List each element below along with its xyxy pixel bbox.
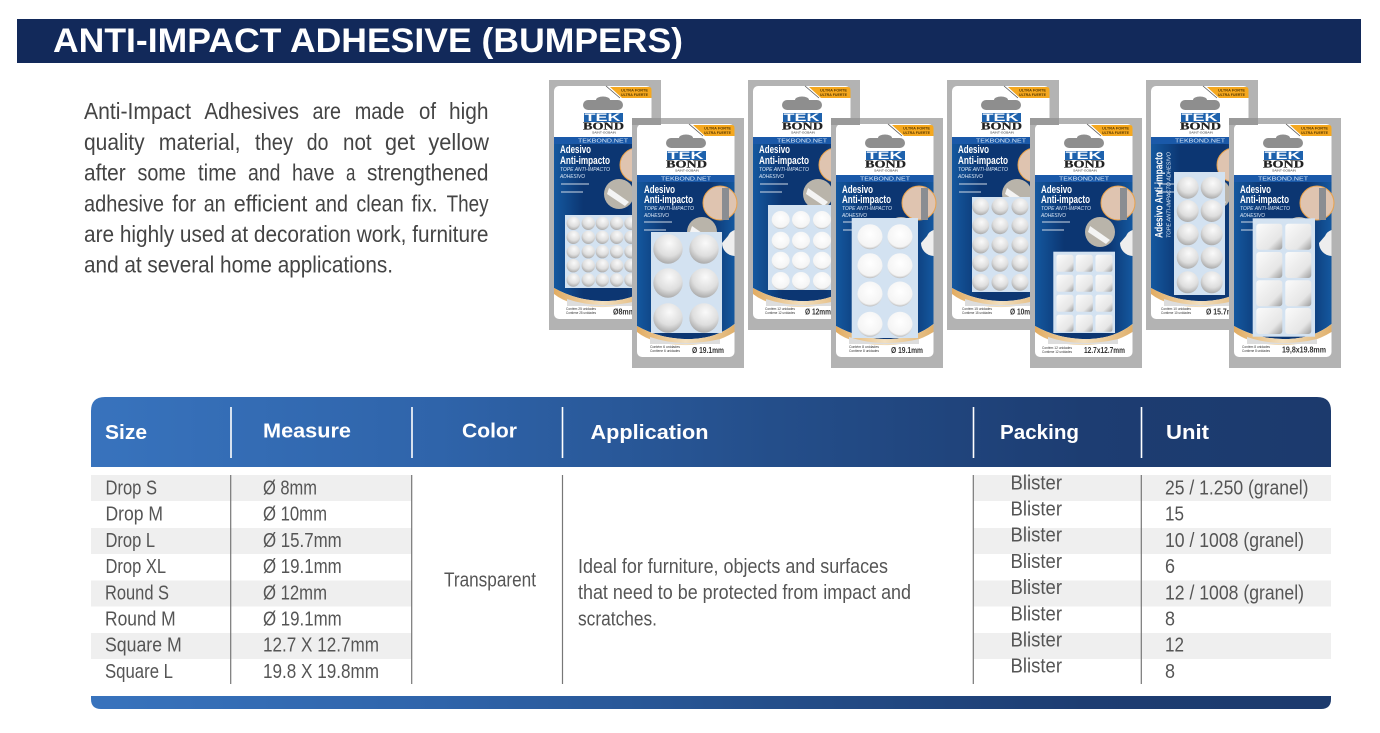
product card: Round S 12mm: ULTRA FORTE	[820, 88, 847, 92]
product card: Drop M 10mm: Contém 15 unidades	[962, 307, 992, 311]
product card: Drop S 8mm: ULTRA FORTE	[621, 88, 648, 92]
intro text block: not	[343, 129, 372, 155]
product card: Round S 12mm: Contém 12 unidades	[765, 307, 795, 311]
product card: Drop S 8mm: ULTRA FUERTE	[621, 93, 648, 97]
product card: Round S 12mm: TOPE ANTI-IMPACTO	[759, 167, 810, 173]
product card: Drop S 8mm: BOND	[583, 120, 624, 132]
product card: Drop XL 19.1mm: Contiene 6 unidades	[650, 349, 680, 353]
product card: Drop L 15.7mm: Ø 15.7mm	[1206, 306, 1239, 316]
column: size: Square M	[105, 634, 182, 657]
product card: Drop XL 19.1mm: Anti-impacto	[644, 194, 693, 206]
product card: Drop L 15.7mm: BOND	[1180, 120, 1221, 132]
table header: Size	[105, 421, 147, 444]
product card: Square M 12.7 x 12.7mm: SAINT-GOBAIN	[1073, 168, 1097, 172]
column: application: scratches.	[578, 608, 657, 630]
column: size: Square L	[105, 660, 173, 683]
table header: Packing	[1000, 421, 1079, 444]
column: packing: Blister	[1010, 471, 1062, 494]
intro text block: Anti-Impact	[84, 98, 192, 124]
product card: Drop XL 19.1mm	[632, 118, 744, 368]
product card: Drop S 8mm: TEKBOND.NET	[578, 138, 629, 144]
intro text block: they	[255, 129, 293, 155]
product card: Drop XL 19.1mm: ULTRA FORTE	[704, 126, 731, 130]
column: measure: Ø 15.7mm	[263, 529, 342, 552]
product card: Drop M 10mm: Anti-impacto	[958, 155, 1008, 167]
column: measure: 19.8 X 19.8mm	[263, 660, 379, 683]
column: unit: 25 / 1.250 (granel)	[1165, 476, 1308, 500]
column: measure: Ø 12mm	[263, 581, 327, 604]
product card: Round M 19.1mm: Adesivo	[842, 184, 873, 196]
product card: Square M 12.7 x 12.7mm: TEKBOND.NET	[1059, 176, 1110, 182]
intro text block: after	[84, 160, 126, 186]
column: color: Transparent	[444, 568, 536, 592]
product card: Round M 19.1mm: Contém 8 unidades	[849, 345, 879, 349]
column: size: Round M	[105, 608, 176, 630]
product card: Round M 19.1mm: TOPE ANTI-IMPACTO	[842, 206, 893, 212]
product card: Drop S 8mm: TOPE ANTI-IMPACTO	[560, 167, 611, 173]
product card: Drop M 10mm: TEK	[982, 112, 1019, 124]
product card: Round M 19.1mm: SAINT-GOBAIN	[874, 168, 898, 172]
product card: Drop L 15.7mm: TOPE ANTI-IMPACTO ADHESIVO	[1166, 151, 1172, 238]
product card: Drop XL 19.1mm: Ø 19.1mm	[692, 345, 724, 355]
product card: Round M 19.1mm: ADHESIVO	[841, 213, 868, 219]
product card: Square L 19.8 x 19.8mm: ULTRA FORTE	[1301, 126, 1328, 130]
intro text block: a	[346, 160, 356, 186]
product card: Drop XL 19.1mm: TOPE ANTI-IMPACTO	[644, 206, 695, 212]
table header: Application	[590, 421, 708, 444]
product card: Round M 19.1mm: TEKBOND.NET	[860, 176, 911, 182]
product card: Round M 19.1mm: Contiene 8 unidades	[849, 349, 879, 353]
column: unit: 10 / 1008 (granel)	[1165, 529, 1304, 552]
column: size: Drop M	[106, 503, 163, 526]
column: measure: Ø 19.1mm	[263, 555, 342, 578]
product card: Drop XL 19.1mm: Contém 6 unidades	[650, 345, 680, 349]
product card: Drop L 15.7mm: ULTRA FORTE	[1218, 88, 1245, 92]
column: application: that need to be protected from impact and	[578, 581, 911, 604]
product card: Drop S 8mm: ADHESIVO	[559, 174, 586, 180]
intro text block: get	[385, 129, 416, 155]
product card: Round S 12mm: Anti-impacto	[759, 155, 809, 167]
product card: Drop L 15.7mm: TEKBOND.NET	[1175, 138, 1226, 144]
product card: Square L 19.8 x 19.8mm: ULTRA FUERTE	[1301, 131, 1328, 135]
product card: Drop S 8mm: Ø8mm	[613, 306, 635, 316]
product card: Round S 12mm: Contiene 12 unidades	[765, 311, 795, 315]
product card: Drop XL 19.1mm: TEK	[668, 150, 704, 162]
column: measure: Ø 19.1mm	[263, 608, 342, 630]
column: packing: Blister	[1010, 655, 1062, 678]
product card: Square M 12.7 x 12.7mm	[1030, 118, 1142, 368]
product card: Drop L 15.7mm: SAINT-GOBAIN	[1189, 130, 1213, 134]
product card: Drop L 15.7mm: ULTRA FUERTE	[1218, 93, 1245, 97]
column: unit: 15	[1165, 503, 1184, 526]
product card: Square L 19.8 x 19.8mm: TEK	[1264, 150, 1301, 162]
column: application: Ideal for furniture, objects and surfaces	[578, 555, 888, 578]
product card: Round M 19.1mm: ULTRA FUERTE	[903, 131, 930, 135]
product card: Round S 12mm: SAINT-GOBAIN	[791, 130, 815, 134]
product card: Drop S 8mm: Adesivo	[560, 144, 591, 156]
product card: Round M 19.1mm: Ø 19.1mm	[891, 345, 923, 355]
intro text block: are	[312, 98, 341, 124]
product card: Drop L 15.7mm: Contiene 10 unidades	[1161, 311, 1191, 315]
column: unit: 12	[1165, 634, 1184, 657]
product card: Drop L 15.7mm: Adesivo Anti-impacto	[1154, 152, 1166, 238]
column: unit: 12 / 1008 (granel)	[1165, 581, 1304, 604]
product card: Round M 19.1mm: ULTRA FORTE	[903, 126, 930, 130]
product card: Drop M 10mm: ULTRA FORTE	[1019, 88, 1046, 92]
product card: Square L 19.8 x 19.8mm: Anti-impacto	[1240, 194, 1289, 206]
table: product specifications	[91, 397, 1331, 709]
intro text block: of	[419, 98, 437, 124]
column: application	[578, 555, 911, 630]
product card: Round S 12mm: TEK	[784, 112, 820, 124]
intro text block: and	[248, 160, 280, 186]
product card: Square M 12.7 x 12.7mm: TOPE ANTI-IMPACTO	[1041, 206, 1092, 212]
product card: Drop M 10mm: TEKBOND.NET	[976, 138, 1027, 144]
intro text block: high	[449, 98, 488, 124]
column: size: Drop S	[106, 476, 157, 500]
column: packing: Blister	[1010, 628, 1062, 652]
intro text block: for	[172, 190, 196, 216]
panel: product blister packs	[549, 80, 1341, 368]
product card: Round M 19.1mm: TEK	[866, 150, 903, 162]
product card: Drop S 8mm: Contiene 25 unidades	[566, 311, 596, 315]
intro text block: have	[292, 160, 334, 186]
product card: Round S 12mm: Ø 12mm	[805, 306, 831, 316]
product card: Square M 12.7 x 12.7mm: ADHESIVO	[1040, 213, 1067, 219]
product card: Square L 19.8 x 19.8mm: Adesivo	[1240, 184, 1271, 196]
column: packing: Blister	[1010, 498, 1062, 520]
column: unit	[1165, 476, 1308, 683]
intro text block: quality	[84, 129, 145, 155]
product card: Square L 19.8 x 19.8mm: Contém 8 unidades	[1242, 345, 1270, 349]
product card: Drop XL 19.1mm: ADHESIVO	[643, 213, 670, 219]
column: size: Drop L	[106, 529, 155, 552]
intro text block: do	[307, 129, 328, 155]
column: size: Round S	[105, 581, 169, 604]
product card: Drop M 10mm	[947, 80, 1059, 330]
product card: Square L 19.8 x 19.8mm: Contiene 8 unidades	[1242, 349, 1270, 353]
product card: Square L 19.8 x 19.8mm	[1229, 118, 1341, 368]
title banner	[17, 19, 1361, 63]
column: measure: Ø 10mm	[263, 503, 327, 526]
table footer bar	[91, 696, 1331, 709]
product card: Round S 12mm: ULTRA FUERTE	[820, 93, 847, 97]
column: packing: Blister	[1010, 576, 1062, 599]
product card: Square L 19.8 x 19.8mm: 19,8x19.8mm	[1282, 344, 1326, 354]
intro text block: are highly used at decoration work, furniture	[84, 221, 488, 247]
intro text block: made	[355, 98, 404, 124]
column: measure: 12.7 X 12.7mm	[263, 634, 379, 657]
column: size	[105, 476, 182, 683]
column: measure	[263, 476, 379, 683]
product card: Square L 19.8 x 19.8mm: ADHESIVO	[1239, 213, 1266, 219]
intro text block: yellow	[428, 129, 489, 155]
product card: Square L 19.8 x 19.8mm: TOPE ANTI-IMPACTO	[1240, 206, 1291, 212]
table header: Unit	[1166, 421, 1209, 444]
product card: Square L 19.8 x 19.8mm: SAINT-GOBAIN	[1272, 168, 1296, 172]
table header	[91, 397, 1331, 467]
product card: Round M 19.1mm: BOND	[865, 158, 906, 170]
product card: Square L 19.8 x 19.8mm: BOND	[1263, 158, 1304, 170]
product card: Round S 12mm	[748, 80, 860, 330]
heading: ANTI-IMPACT ADHESIVE (BUMPERS)	[53, 22, 683, 60]
product card: Drop XL 19.1mm: Adesivo	[644, 184, 675, 196]
product card: Square M 12.7 x 12.7mm: 12.7x12.7mm	[1084, 345, 1125, 355]
product card: Square M 12.7 x 12.7mm: Anti-impacto	[1041, 194, 1090, 206]
product card: Square M 12.7 x 12.7mm: BOND	[1064, 158, 1105, 170]
product card: Drop XL 19.1mm: SAINT-GOBAIN	[675, 168, 699, 172]
table header: Color	[462, 420, 517, 442]
column: measure: Ø 8mm	[263, 476, 317, 500]
intro text block: strengthened	[367, 160, 488, 186]
column: packing	[1010, 471, 1062, 678]
intro text block: time	[198, 160, 236, 186]
product card: Square M 12.7 x 12.7mm: ULTRA FORTE	[1102, 126, 1129, 130]
product card: Drop M 10mm: ULTRA FUERTE	[1019, 93, 1046, 97]
column: unit: 6	[1165, 555, 1175, 578]
product card: Drop S 8mm: SAINT-GOBAIN	[592, 130, 616, 134]
product card: Drop XL 19.1mm: TEKBOND.NET	[661, 176, 712, 182]
product card: Square M 12.7 x 12.7mm: Adesivo	[1041, 184, 1072, 196]
intro text block: They	[447, 190, 489, 216]
intro text block: Adhesives	[204, 98, 299, 124]
product card: Round S 12mm: ADHESIVO	[758, 174, 785, 180]
product card: Round S 12mm: BOND	[782, 120, 823, 132]
product card: Drop L 15.7mm	[1146, 80, 1258, 330]
product card: Drop XL 19.1mm: BOND	[666, 158, 707, 170]
product card: Round M 19.1mm: Anti-impacto	[842, 194, 891, 206]
product card: Round S 12mm: Adesivo	[759, 144, 790, 156]
product card: Round S 12mm: TEKBOND.NET	[777, 138, 828, 144]
column: unit: 8	[1165, 608, 1175, 630]
table header: Measure	[263, 420, 351, 442]
product card: Drop S 8mm: TEK	[584, 112, 621, 124]
intro text block: and at several home applications.	[84, 252, 393, 278]
product card: Square M 12.7 x 12.7mm: Contém 12 unidades	[1042, 346, 1072, 350]
product card: Square L 19.8 x 19.8mm: TEKBOND.NET	[1258, 176, 1309, 182]
intro text block: material,	[159, 129, 240, 155]
product card: Drop S 8mm	[549, 80, 661, 330]
column: packing: Blister	[1010, 602, 1062, 625]
product card: Drop M 10mm: Ø 10mm	[1010, 306, 1036, 316]
product card: Drop M 10mm: Contiene 15 unidades	[962, 311, 992, 315]
column: packing: Blister	[1010, 524, 1062, 547]
intro text block	[84, 98, 489, 278]
intro text block: fix.	[412, 190, 438, 216]
product card: Drop M 10mm: SAINT-GOBAIN	[990, 130, 1014, 134]
product card: Drop M 10mm: TOPE ANTI-IMPACTO	[958, 167, 1009, 173]
product card: Drop M 10mm: Adesivo	[958, 144, 989, 156]
product card: Square M 12.7 x 12.7mm: TEK	[1066, 150, 1102, 162]
product card: Square M 12.7 x 12.7mm: Contiene 12 unidades	[1042, 350, 1072, 354]
product card: Drop L 15.7mm: Contém 10 unidades	[1161, 307, 1191, 311]
product card: Drop M 10mm: BOND	[981, 120, 1022, 132]
product card: Drop XL 19.1mm: ULTRA FUERTE	[704, 131, 731, 135]
column: size: Drop XL	[106, 555, 166, 578]
intro text block: some	[138, 160, 186, 186]
product card: Drop S 8mm: Anti-impacto	[560, 155, 610, 167]
intro text block: and	[315, 190, 348, 216]
intro text block: an	[204, 190, 226, 216]
intro text block: clean	[356, 190, 404, 216]
intro text block: efficient	[234, 190, 308, 216]
column: unit: 8	[1165, 660, 1175, 683]
product card: Drop S 8mm: Contém 25 unidades	[566, 307, 596, 311]
product card: Round M 19.1mm	[831, 118, 943, 368]
intro text block: adhesive	[84, 190, 164, 216]
product card: Drop M 10mm: ADHESIVO	[957, 174, 984, 180]
product card: Square M 12.7 x 12.7mm: ULTRA FUERTE	[1102, 131, 1129, 135]
product card: Drop L 15.7mm: TEK	[1182, 112, 1218, 124]
column: packing: Blister	[1010, 550, 1062, 573]
